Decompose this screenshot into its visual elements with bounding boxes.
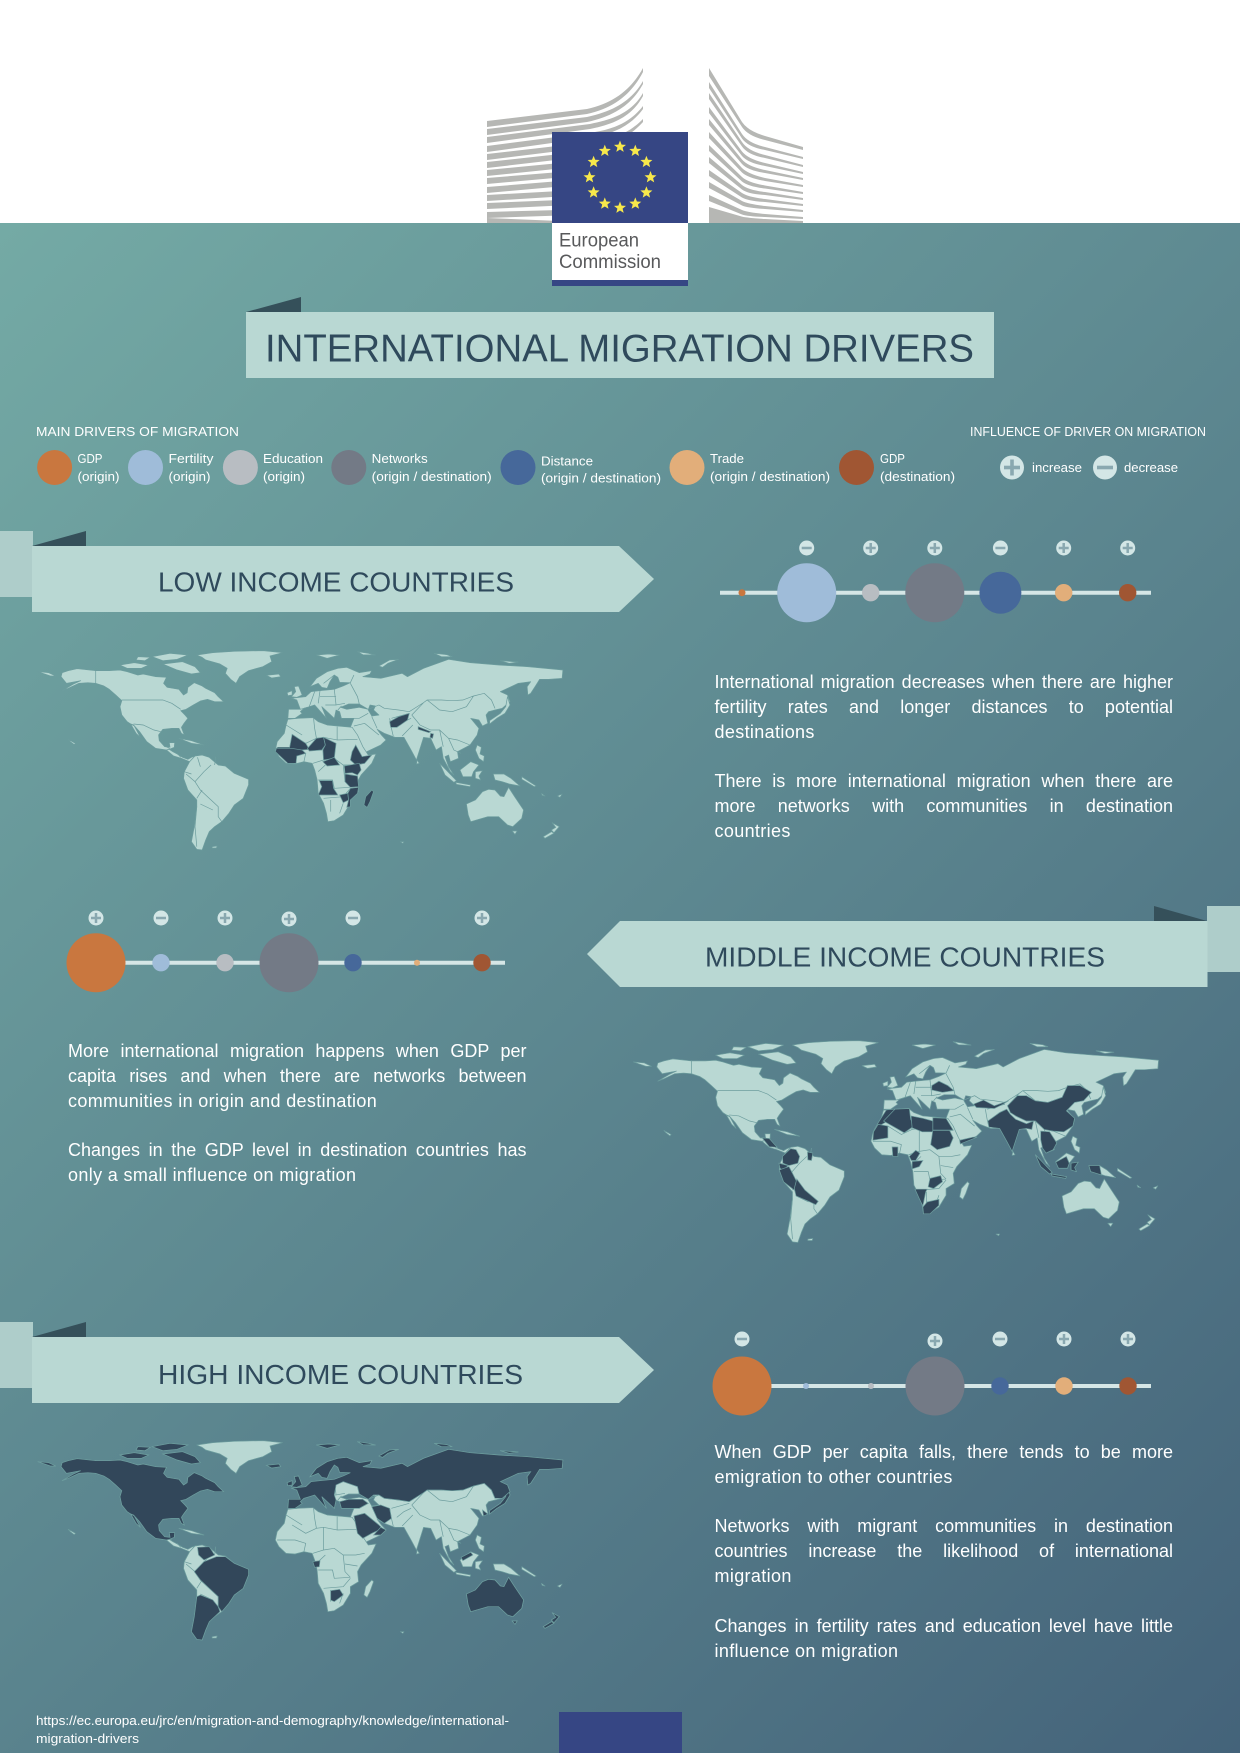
- banner: low income countries: [0, 531, 654, 612]
- text block: middle income findings: only a small influence on migration: [68, 1165, 356, 1185]
- text block: low income findings: more networks with communities in destination: [714, 796, 1173, 816]
- bubble chart: middle income drivers: [66, 910, 505, 992]
- text block: high income findings: emigration to other countries: [714, 1466, 953, 1486]
- legend: main drivers of migration: (origin / destination): [710, 469, 830, 484]
- map: middle income countries: [634, 1041, 1159, 1242]
- legend: main drivers of migration: (destination): [880, 469, 955, 484]
- footer: source link: migration-drivers: [36, 1731, 140, 1746]
- banner: low income countries: LOW INCOME COUNTRIES: [158, 566, 514, 598]
- legend: main drivers of migration: GDP: [78, 451, 102, 466]
- map: low income countries: [38, 651, 563, 850]
- footer: source link: [36, 1713, 509, 1746]
- bubble chart: high income drivers: [712, 1332, 1151, 1416]
- text block: low income findings: fertility rates and longer distances to potential: [714, 696, 1173, 716]
- legend: main drivers of migration: Networks: [372, 451, 428, 466]
- legend: influence of driver on migration: decrease: [1124, 460, 1178, 475]
- banner: high income countries: [0, 1322, 654, 1403]
- legend: main drivers of migration: (origin): [263, 469, 305, 484]
- text block: low income findings: International migration decreases when there are higher: [714, 672, 1173, 692]
- legend: main drivers of migration: Distance: [541, 454, 593, 468]
- legend: main drivers of migration: GDP: [880, 451, 905, 466]
- text block: high income findings: migration: [714, 1566, 792, 1586]
- logo: European Commission emblem: European: [559, 230, 639, 252]
- legend: main drivers of migration: MAIN DRIVERS OF MIGRATION: [36, 424, 239, 439]
- text block: high income findings: When GDP per capita falls, there tends to be more: [714, 1442, 1173, 1462]
- bubble chart: low income drivers: [720, 540, 1151, 622]
- text block: high income findings: countries increase the likelihood of international: [714, 1541, 1173, 1561]
- legend: main drivers of migration: (origin): [168, 469, 210, 484]
- map: high income countries: [38, 1441, 563, 1640]
- legend: main drivers of migration: (origin): [78, 469, 120, 484]
- legend: influence of driver on migration: INFLUENCE OF DRIVER ON MIGRATION: [970, 424, 1206, 439]
- text block: middle income findings: communities in origin and destination: [68, 1090, 377, 1110]
- text block: low income findings: [714, 672, 1173, 841]
- logo: Berlaymont building: [487, 68, 803, 226]
- text block: low income findings: destinations: [714, 722, 815, 742]
- logo: European Commission emblem: [552, 132, 688, 286]
- legend: influence of driver on migration: [970, 424, 1206, 480]
- text block: high income findings: [714, 1442, 1173, 1661]
- legend: influence of driver on migration: increase: [1032, 460, 1082, 475]
- legend: main drivers of migration: Fertility: [168, 451, 214, 466]
- banner: middle income countries: MIDDLE INCOME COUNTRIES: [705, 942, 1105, 972]
- legend: main drivers of migration: Education: [263, 451, 323, 466]
- legend: main drivers of migration: Trade: [710, 451, 744, 466]
- text block: middle income findings: [68, 1040, 526, 1185]
- logo: European Commission emblem: Commission: [559, 252, 661, 273]
- banner: middle income countries: [587, 906, 1240, 987]
- text block: middle income findings: Changes in the GDP level in destination countries has: [68, 1140, 526, 1160]
- legend: main drivers of migration: (origin / destination): [541, 470, 661, 486]
- text block: middle income findings: capita rises and when there are networks between: [68, 1066, 526, 1086]
- legend: main drivers of migration: [36, 424, 955, 486]
- title banner: INTERNATIONAL MIGRATION DRIVERS: [265, 328, 974, 370]
- text block: high income findings: Changes in fertility rates and education level have little: [714, 1616, 1173, 1636]
- text block: high income findings: influence on migration: [714, 1640, 898, 1660]
- text block: middle income findings: More international migration happens when GDP per: [68, 1040, 526, 1060]
- legend: main drivers of migration: (origin / destination): [372, 469, 492, 484]
- text block: low income findings: countries: [714, 821, 791, 841]
- footer: blue logo strip: [559, 1712, 682, 1753]
- footer: source link: https://ec.europa.eu/jrc/en/migration-and-demography/knowledge/international-: [36, 1713, 509, 1728]
- text block: high income findings: Networks with migrant communities in destination: [714, 1516, 1173, 1536]
- banner: high income countries: HIGH INCOME COUNTRIES: [158, 1359, 523, 1390]
- text block: low income findings: There is more international migration when there are: [714, 771, 1173, 791]
- title banner: [246, 297, 994, 378]
